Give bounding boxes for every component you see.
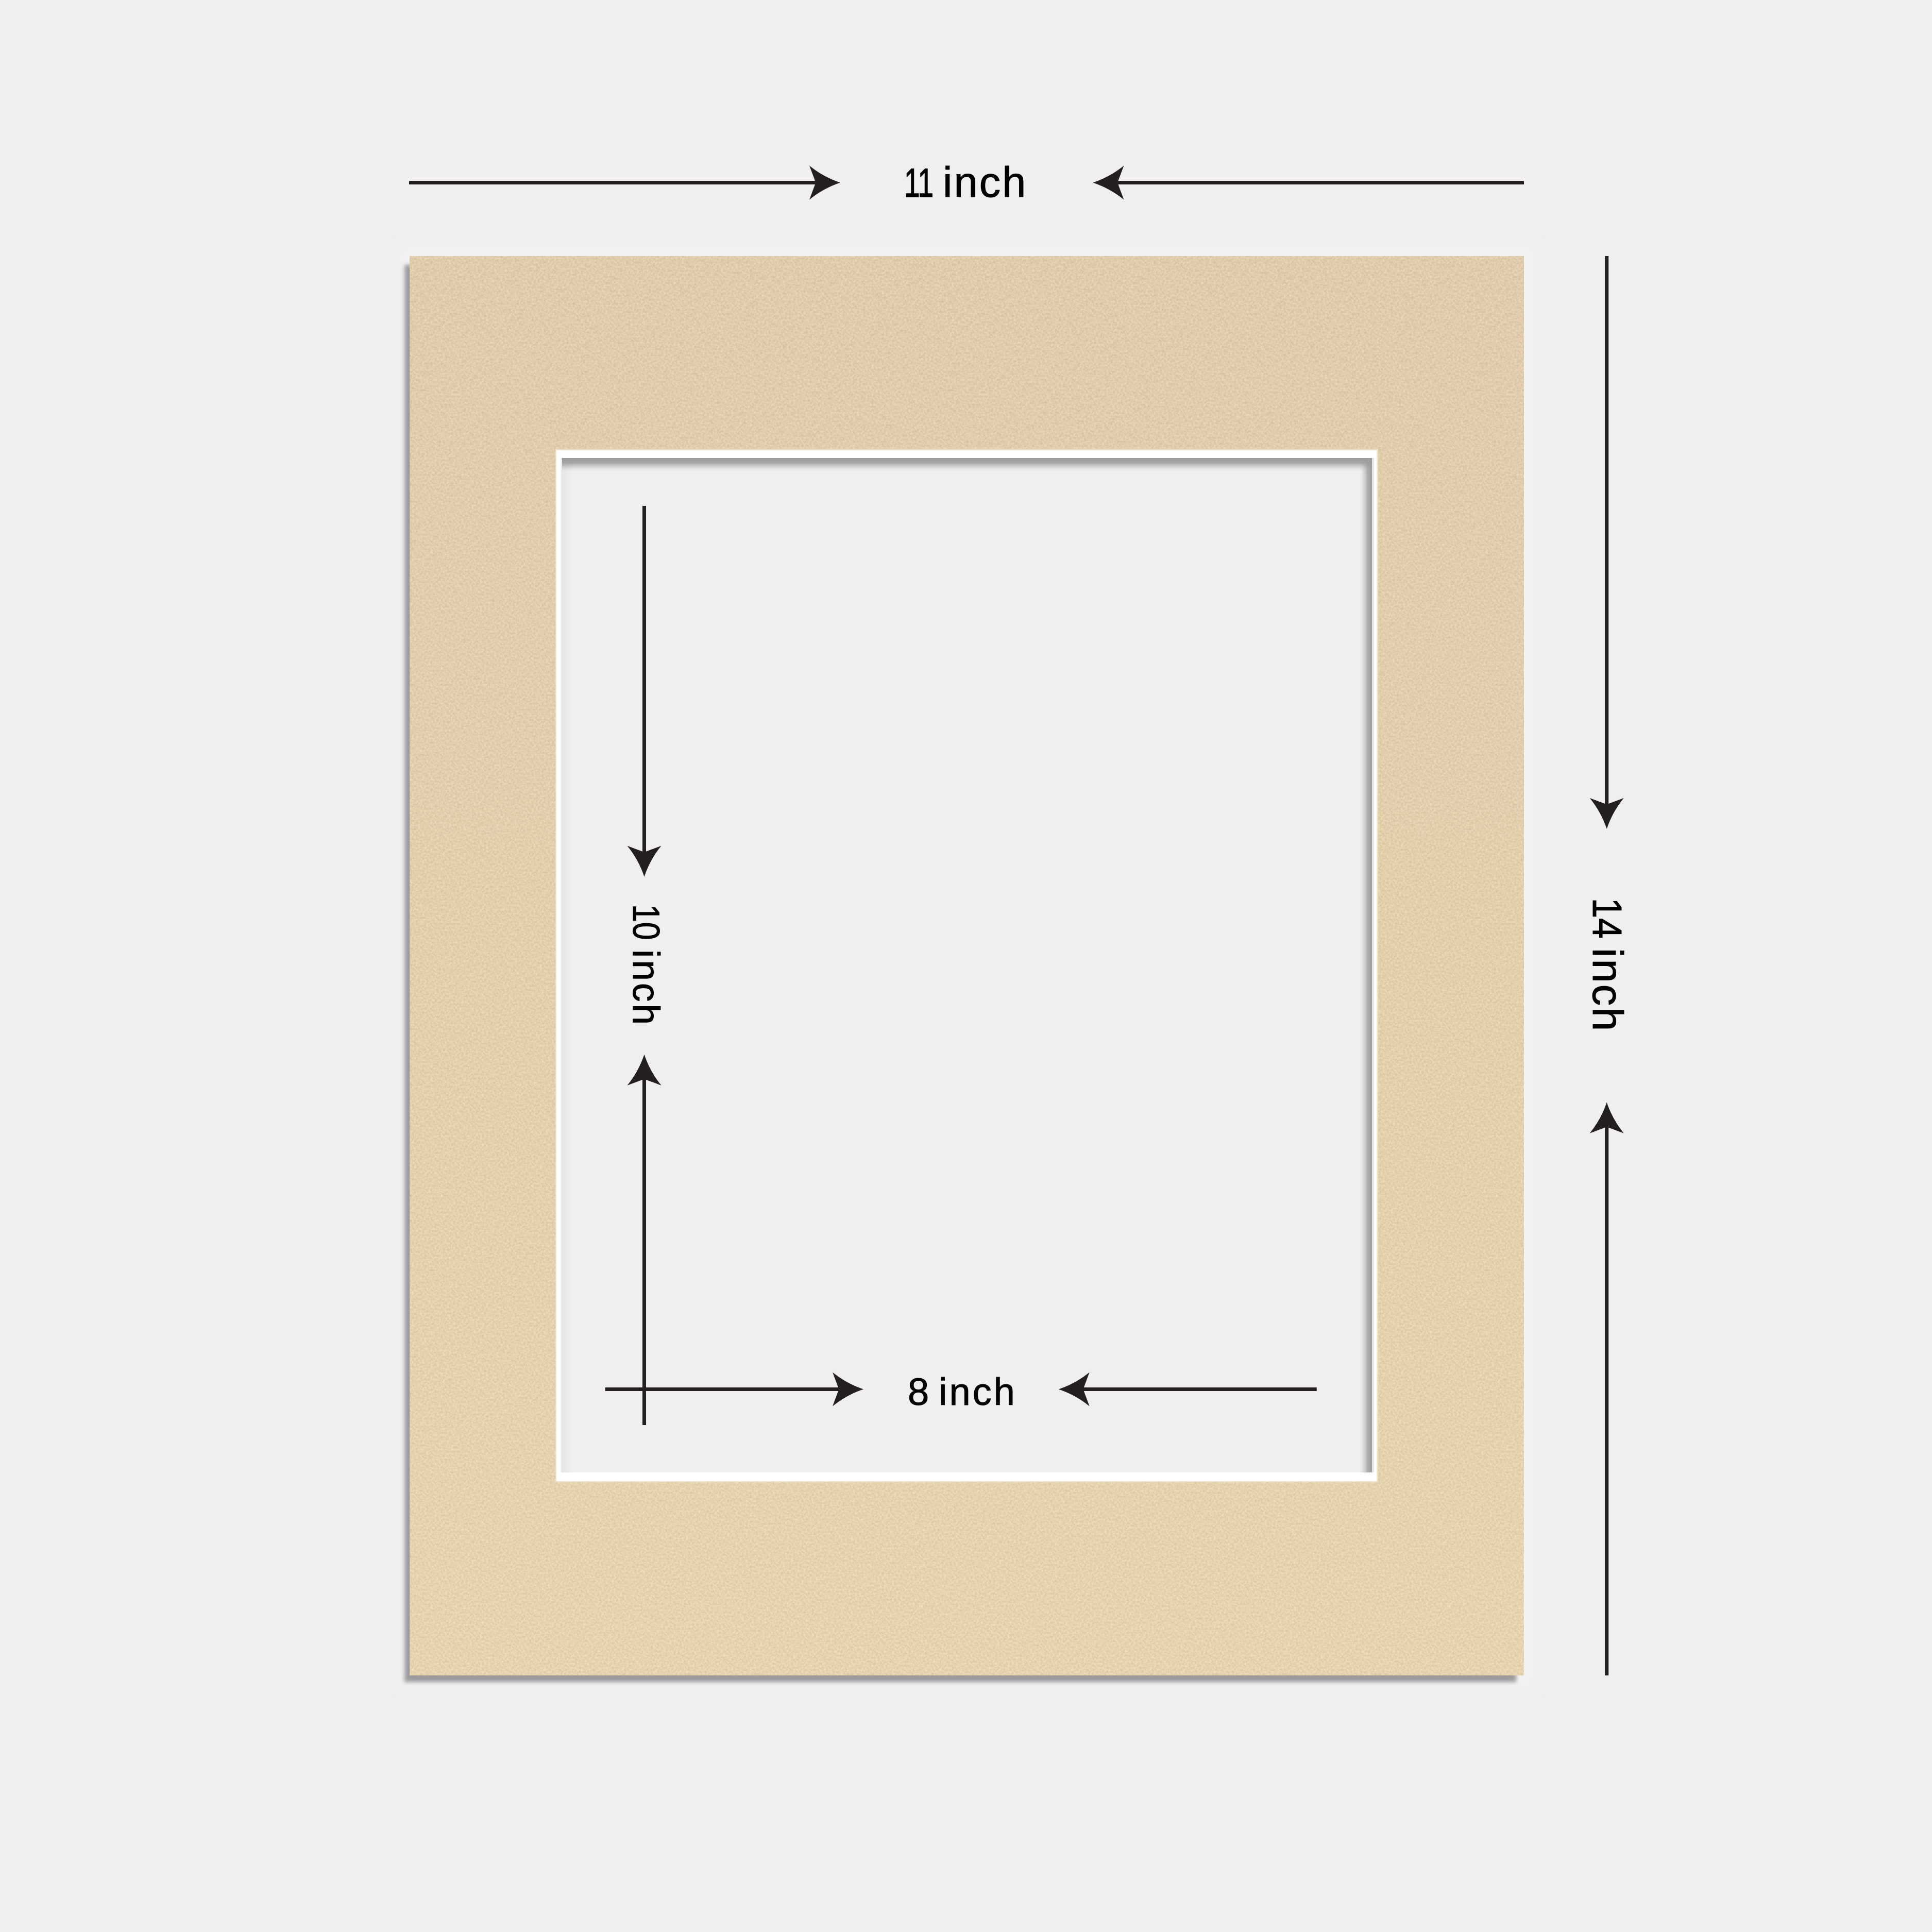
arrow: outer height, top side [1590,256,1624,829]
white bevel [556,450,1377,1481]
inner shadow: left [562,458,573,1472]
label: 10 inch: inch [625,950,667,1027]
mat surface [410,256,1524,1675]
arrow: inner width, left side [605,1372,863,1406]
arrow: outer width, left side [409,166,840,200]
mat drop shadow [404,265,1516,1682]
inner shadow: right [1360,458,1372,1472]
panel: mat board [402,247,1533,1685]
label: 11 inch: inch [943,158,1027,206]
inner shadow: top [562,458,1372,471]
label: 11 inch: 11 [904,160,934,206]
arrow: inner height, bottom side [628,1055,662,1425]
bevel edge highlight [555,449,1378,1482]
label: 8 inch: 8 [908,1370,929,1413]
arrow: outer height, bottom side [1590,1103,1624,1675]
arrow: inner width, right side [1059,1372,1317,1406]
arrow: outer width, right side [1093,166,1524,200]
arrow: inner height, top side [628,506,662,877]
label: 8 inch: inch [939,1370,1017,1413]
label: 14 inch: 14 [1584,898,1630,939]
label: 14 inch: inch [1584,948,1632,1032]
window cut-out [555,449,1378,1482]
mat light halo [402,247,1533,1685]
window opening [561,458,1372,1472]
label: 10 inch: 10 [625,904,667,940]
right bevel light strip [1372,458,1374,1472]
